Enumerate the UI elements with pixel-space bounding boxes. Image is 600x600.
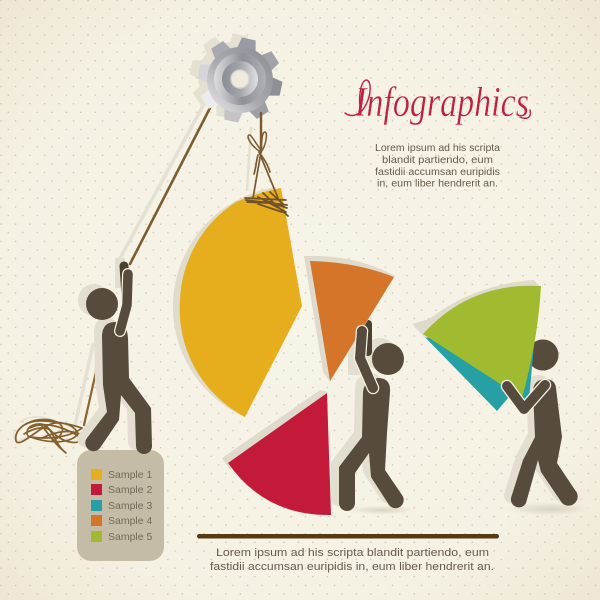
figure 2 head [372,343,404,375]
pie slice: green [412,280,541,398]
gear hole [231,70,249,88]
pie slice: red [222,390,331,515]
figure 3 carrying green and teal slices [504,340,578,507]
intro text [375,142,500,190]
intro text: blandit partiendo, eum [382,154,493,166]
binding on yellow slice [245,192,288,216]
pie slice: yellow [173,187,302,417]
figure 2 body [339,378,404,511]
figure 2 lifting orange slice [331,324,404,511]
legend item: sample 5: Sample 5 [108,531,153,543]
figure 3 shadow [504,375,571,503]
gear shadow [189,33,266,119]
legend item: sample 3: Sample 3 [108,500,153,512]
figure 1 shadow [77,258,144,450]
figure 2 raised arm [360,331,373,388]
legend item: sample 4: Sample 4 [108,515,153,527]
intro text: fastidii accumsan euripidis [375,166,500,178]
pie slice: teal [417,312,537,411]
gear teeth [197,37,283,123]
gear body [207,47,273,113]
footer text [210,547,494,573]
figure 1 pulling the rope [77,258,152,454]
legend item: sample 2: Sample 2 [108,484,153,496]
figure 3 head [528,340,558,370]
figure 2 shadow [331,335,396,506]
ground shadows [344,501,600,517]
hanging rope with bow [245,113,288,216]
footer text: fastidii accumsan euripidis in, eum liber hendrerit an. [210,561,494,573]
figure 1 back hand [124,266,126,296]
figure 1 body [85,322,152,454]
pie slice: orange [304,256,395,382]
rope tangle [14,417,84,453]
footer text: Lorem ipsum ad his scripta blandit partiendo, eum [216,547,489,559]
intro text: in, eum liber hendrerit an. [377,178,498,190]
gear [189,33,283,123]
title: Infographics [354,80,529,126]
figure 3 body [511,379,578,507]
figure 2 back hand [364,324,372,352]
rope: gear to first figure [75,104,211,425]
legend panel [77,450,164,561]
ground bar [197,534,499,538]
figure 1 raised arm [120,274,128,331]
intro text: Lorem ipsum ad his scripta [375,142,500,154]
figure 3 arm [507,385,545,409]
legend item: sample 1: Sample 1 [108,469,153,481]
figure 1 head [86,288,118,320]
